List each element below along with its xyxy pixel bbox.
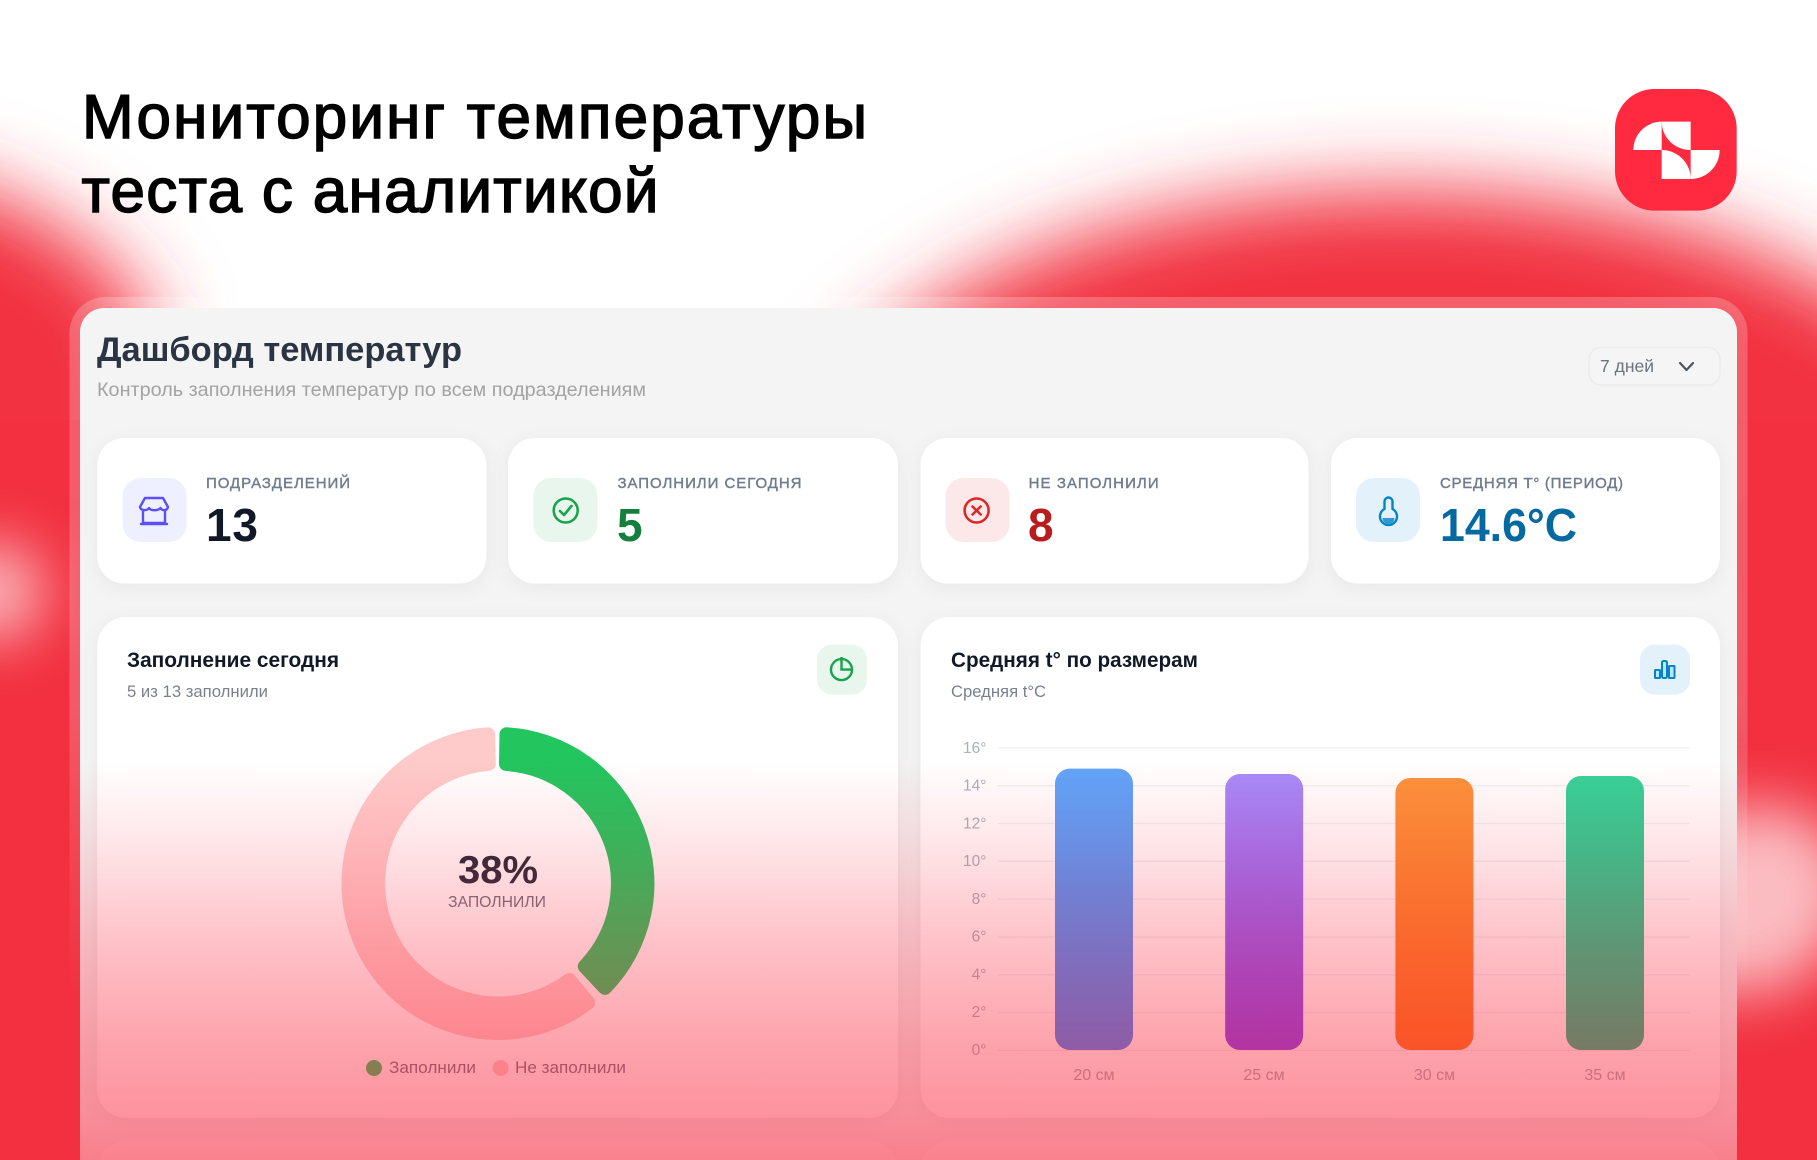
period selector: 7 дней bbox=[1600, 356, 1654, 376]
dashboard heading: Дашборд температур bbox=[97, 331, 462, 369]
donut chart bbox=[348, 734, 647, 1033]
donut legend: Заполнили bbox=[389, 1058, 476, 1077]
stat value: 8 bbox=[1028, 499, 1054, 551]
dashboard glass frame bbox=[70, 297, 1748, 1160]
icon: cross circle bbox=[946, 478, 1010, 542]
icon: thermometer bbox=[1356, 478, 1420, 542]
donut legend: Не заполнили bbox=[515, 1058, 626, 1077]
stat label: НЕ ЗАПОЛНИЛИ bbox=[1029, 475, 1159, 492]
x axis labels: 25 см bbox=[1243, 1067, 1285, 1084]
y axis labels: 8° bbox=[972, 891, 986, 908]
next row of panels, cut off by the page edge bbox=[99, 1141, 1718, 1160]
red gradient fade over the dashboard bbox=[80, 700, 1737, 1160]
donut segment: filled 38% bbox=[506, 734, 647, 988]
donut percentage: 38% bbox=[458, 849, 538, 892]
stat value: 14.6°C bbox=[1440, 499, 1577, 551]
stat label: СРЕДНЯЯ Т° (ПЕРИОД) bbox=[1440, 475, 1623, 492]
bar chart bbox=[963, 740, 1690, 1084]
y axis labels: 16° bbox=[963, 740, 986, 757]
y axis labels bbox=[963, 740, 986, 1059]
x axis labels bbox=[1073, 1067, 1626, 1084]
stat card: filled today bbox=[508, 438, 898, 584]
donut segment: not filled 62% bbox=[348, 734, 588, 1033]
y axis labels: 10° bbox=[963, 853, 986, 870]
stat value: 5 bbox=[617, 499, 643, 551]
icon: check circle bbox=[534, 478, 598, 542]
x axis labels: 20 см bbox=[1073, 1067, 1115, 1084]
donut caption: ЗАПОЛНИЛИ bbox=[448, 894, 546, 911]
panel: dashboard bbox=[80, 308, 1737, 1160]
donut legend bbox=[366, 1058, 626, 1077]
x axis labels: 35 см bbox=[1584, 1067, 1626, 1084]
panel heading: Заполнение сегодня bbox=[127, 649, 339, 672]
y axis labels: 2° bbox=[972, 1004, 986, 1021]
title: Мониторинг температуры bbox=[82, 83, 867, 152]
stat card: subdivisions bbox=[97, 438, 486, 584]
y axis labels: 4° bbox=[972, 966, 986, 984]
y axis labels: 14° bbox=[963, 778, 986, 794]
bar: 35 cm bbox=[1566, 776, 1644, 1050]
icon: pie chart bbox=[817, 645, 867, 695]
title bbox=[82, 83, 867, 226]
icon: store bbox=[123, 478, 187, 542]
stat value: 13 bbox=[206, 499, 258, 551]
x axis labels: 30 см bbox=[1414, 1067, 1455, 1084]
icon: bar chart bbox=[1640, 645, 1690, 695]
panel subtitle: Средняя t°C bbox=[951, 682, 1046, 701]
panel subtitle: 5 из 13 заполнили bbox=[127, 682, 268, 701]
period selector bbox=[1589, 348, 1720, 385]
panel: average temperature by size bbox=[920, 617, 1720, 1118]
dashboard subtitle: Контроль заполнения температур по всем подразделениям bbox=[97, 379, 646, 401]
bar: 25 cm bbox=[1225, 774, 1303, 1050]
y axis labels: 0° bbox=[972, 1042, 986, 1059]
logo: red rounded square with white geometric mark bbox=[1615, 89, 1737, 211]
stat label: ЗАПОЛНИЛИ СЕГОДНЯ bbox=[618, 475, 802, 492]
bar: 30 cm bbox=[1395, 778, 1473, 1050]
stat card: average temperature bbox=[1331, 438, 1720, 584]
title: теста с аналитикой bbox=[82, 157, 658, 226]
y axis labels: 6° bbox=[972, 928, 986, 946]
stat label: ПОДРАЗДЕЛЕНИЙ bbox=[206, 474, 350, 492]
stat card: not filled bbox=[920, 438, 1308, 584]
panel: filled today donut bbox=[97, 617, 898, 1118]
y axis labels: 12° bbox=[963, 816, 986, 832]
bar: 20 cm bbox=[1055, 769, 1133, 1050]
panel heading: Средняя t° по размерам bbox=[951, 649, 1198, 672]
